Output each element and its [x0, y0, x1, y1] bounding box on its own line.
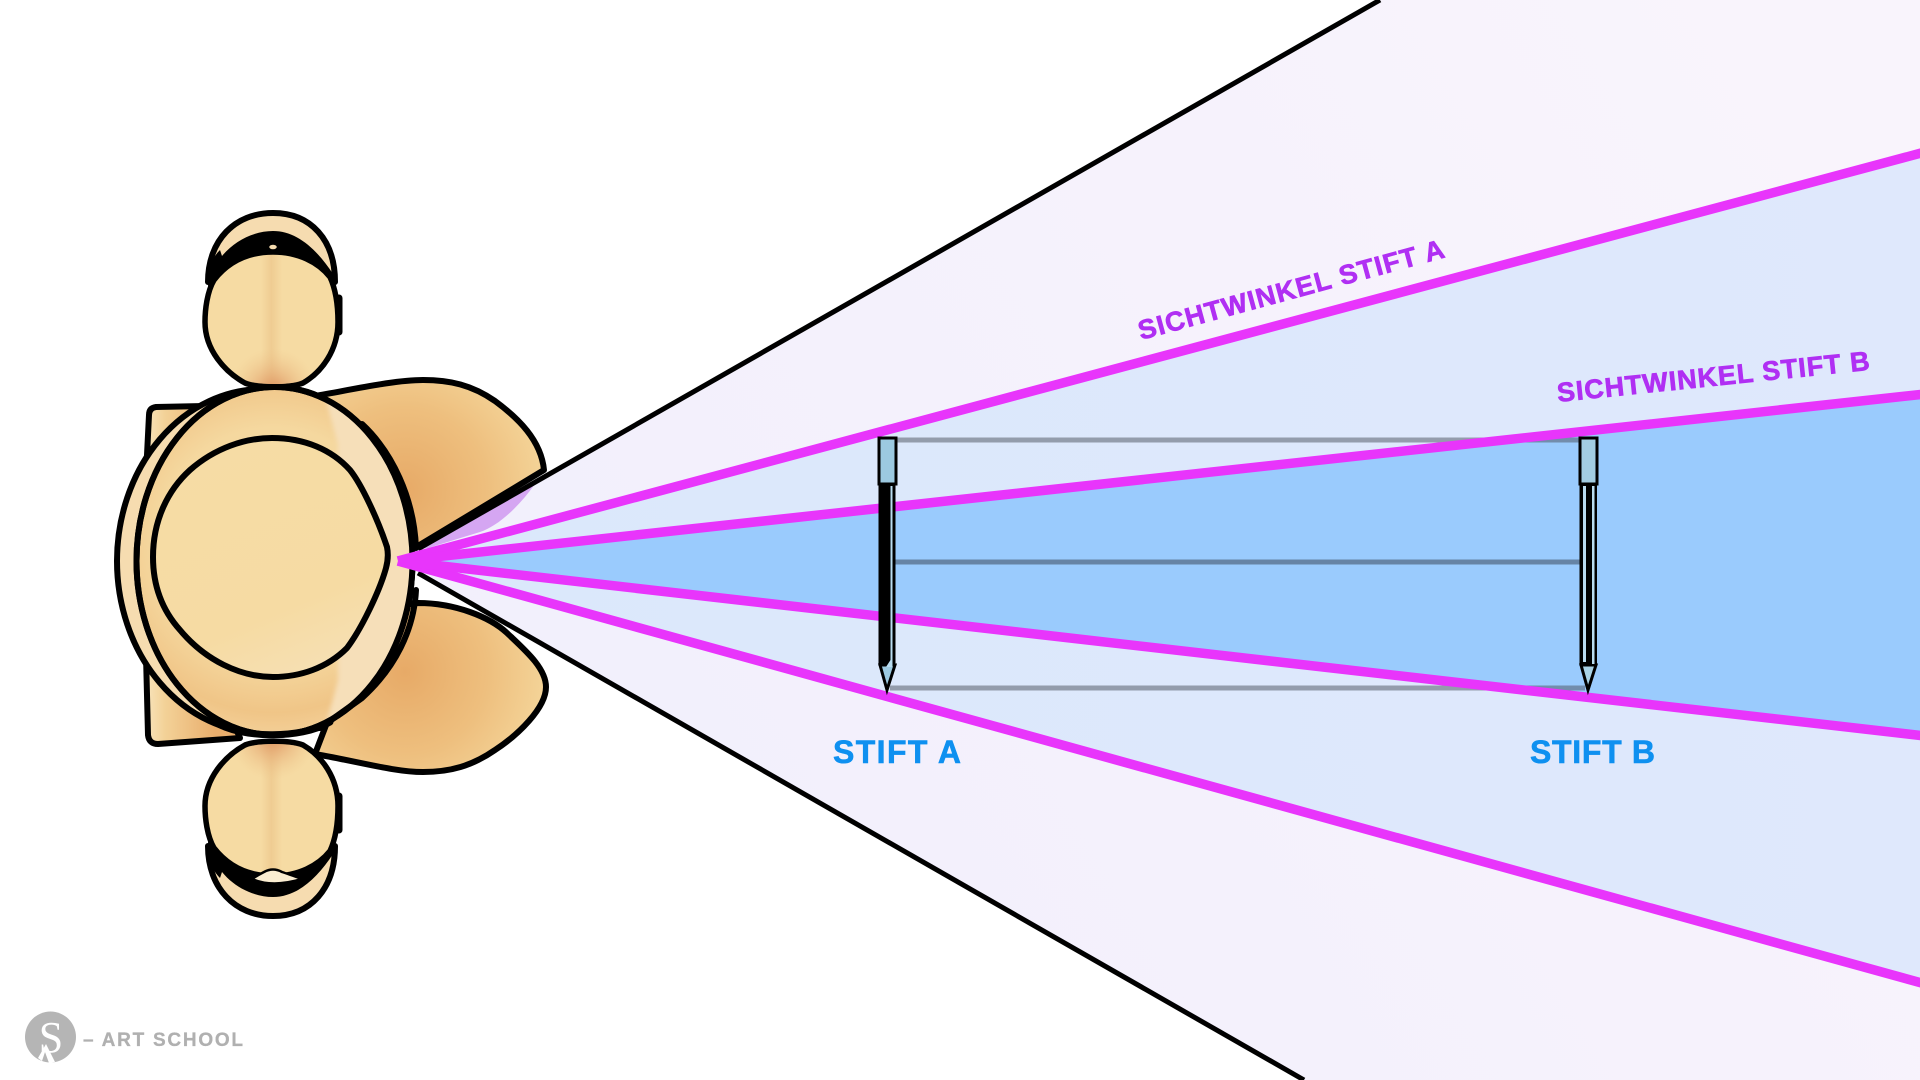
upper arm [315, 380, 544, 546]
bottom shoulder junction [215, 722, 330, 735]
upper leg: dark band [208, 231, 336, 300]
lower leg: foot shading [208, 744, 335, 873]
pencil B right highlight [1592, 486, 1594, 664]
field of view overlap on arm [418, 484, 535, 549]
upper leg: foot [205, 252, 338, 387]
pencil A shaft [878, 484, 896, 666]
outer field of view [398, 0, 1920, 1080]
pencil B cap [1580, 438, 1597, 484]
logo letter: S [39, 1013, 63, 1062]
pencil A highlight [886, 486, 892, 667]
front shoulders outline [136, 387, 412, 735]
label: pencil A: STIFT A [833, 734, 961, 770]
pencil A tip [880, 665, 895, 690]
logo wedge [38, 1044, 55, 1063]
front shoulders [136, 387, 412, 735]
guide line: bottom of pencils [890, 686, 1585, 690]
upper right outer contour [362, 424, 416, 548]
lower leg: cap [208, 846, 335, 916]
shoulder highlight [324, 402, 410, 720]
lower leg: foot [205, 741, 338, 876]
guide line: top of pencils [895, 438, 1580, 442]
upper chair back corner [146, 406, 205, 475]
lower leg: dark band [208, 828, 336, 897]
lower arm [315, 603, 546, 772]
back shoulder outline [117, 389, 409, 733]
sight lines pencil A [398, 152, 1920, 984]
logo badge [25, 1012, 76, 1062]
pencil B left highlight [1583, 486, 1586, 662]
pencil A cap [879, 438, 896, 484]
sight lines pencil B [398, 394, 1920, 736]
pencil B tip [1581, 665, 1596, 690]
logo: art school [25, 1012, 243, 1063]
label: sight angle pencil A: SICHTWINKEL STIFT A [1135, 234, 1448, 346]
lower chair back corner [146, 655, 240, 744]
pencil A [878, 438, 896, 690]
guide line: middle of pencils [895, 560, 1580, 564]
lower right outer contour [320, 590, 416, 728]
upper leg: toe detail [268, 244, 278, 250]
upper leg: cap [208, 213, 335, 282]
lower leg: side thickening [336, 796, 342, 830]
pencil B shaft [1580, 484, 1597, 666]
label: pencil B: STIFT B [1530, 734, 1655, 770]
pencil B [1580, 438, 1597, 690]
field of view boundary lower [418, 573, 1304, 1080]
upper leg: foot shading [208, 255, 335, 384]
upper leg: side thickening [336, 298, 342, 332]
icon: person seen from above [117, 213, 546, 916]
logo wordmark: – ART SCHOOL [83, 1030, 243, 1051]
sight angle pencil B area [398, 395, 1920, 735]
sight angle pencil A area [398, 153, 1920, 983]
label: sight angle pencil B: SICHTWINKEL STIFT B [1556, 346, 1871, 408]
field of view boundary upper [418, 0, 1380, 549]
lower leg: toe detail [252, 870, 302, 884]
head [153, 438, 388, 677]
